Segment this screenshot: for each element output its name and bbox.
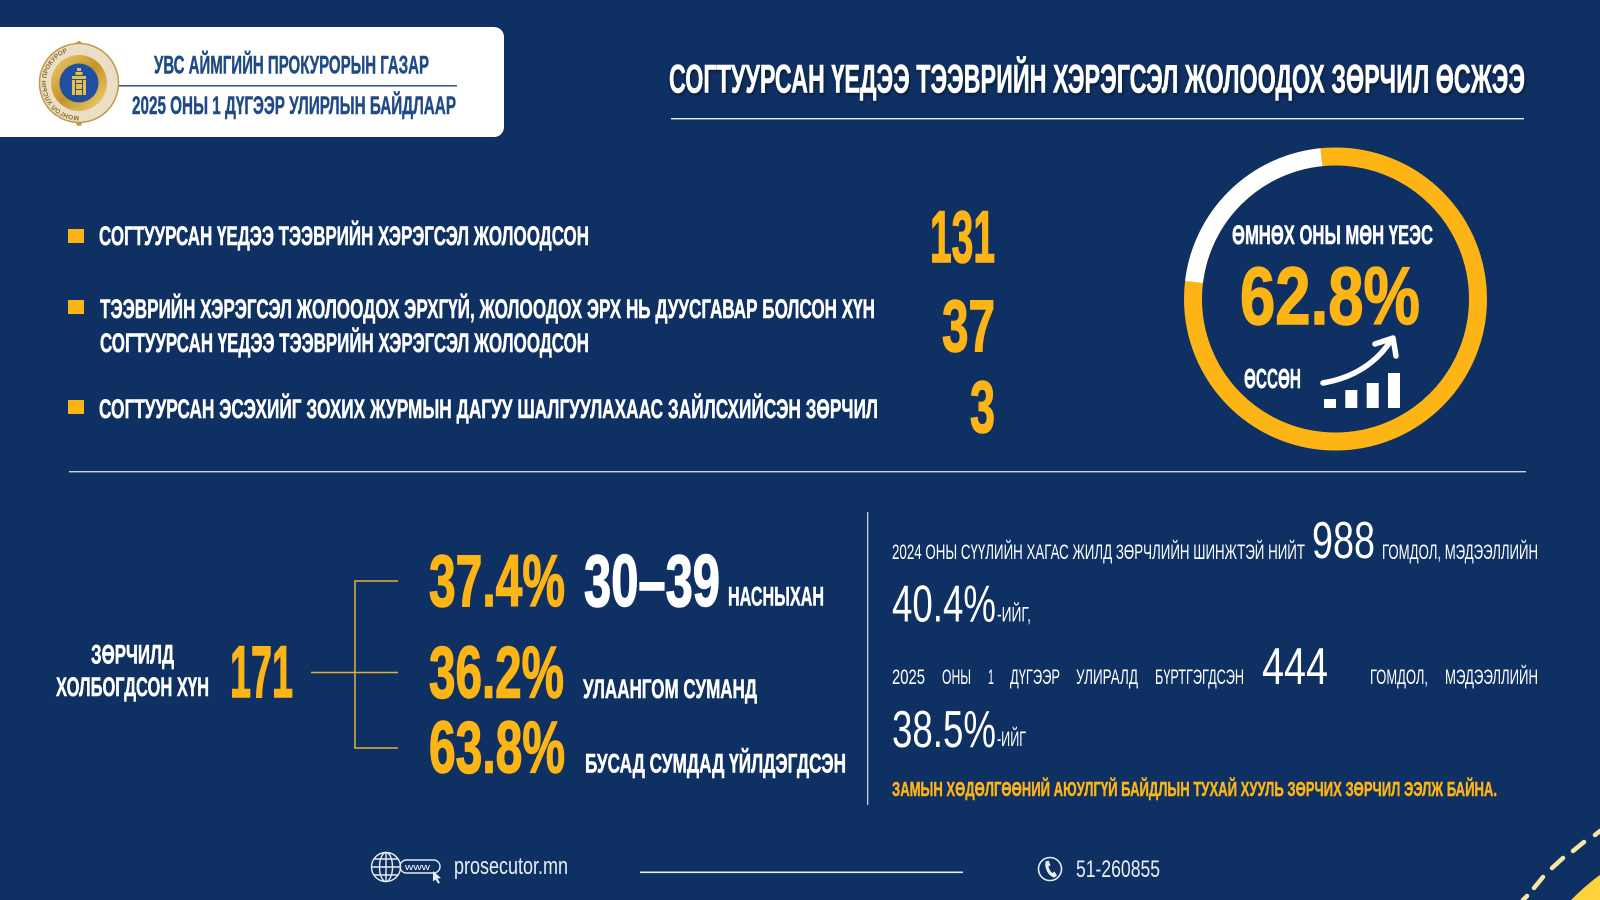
stat: Ulaangom soum: УЛААНГОМ СУМАНД [583, 674, 757, 704]
stat: age group: НАСНЫХАН [728, 582, 824, 612]
icon: prosecutor emblem [38, 41, 120, 126]
stat: other soums [429, 708, 846, 788]
text block: complaints [892, 512, 1538, 801]
list item 2: ТЭЭВРИЙН ХЭРЭГСЭЛ ЖОЛООДОХ ЭРХГҮЙ, ЖОЛООДОХ ЭРХ НЬ ДУУСГАВАР БОЛСОН ХҮН [100, 293, 875, 324]
icon: globe with www: www [404, 862, 431, 872]
stat: age group [429, 541, 824, 622]
footer: phone: 51-260855 [1076, 856, 1160, 883]
icon: phone [1038, 858, 1062, 880]
list item 2 [68, 286, 995, 367]
footer: phone [1038, 856, 1160, 883]
line: 2024 complaints [892, 512, 1538, 634]
donut: growth over last year: ӨМНӨХ ОНЫ МӨН ҮЕЭС [1232, 220, 1433, 250]
total persons [56, 632, 293, 713]
list item 2: 37 [942, 286, 995, 367]
line: 2025 complaints: ОНЫ [942, 666, 971, 689]
donut: growth over last year: 62.8% [1240, 251, 1420, 342]
line: 2025 complaints: 2025 [892, 666, 925, 689]
line: 2024 complaints: 2024 ОНЫ СҮҮЛИЙН ХАГАС ЖИЛД ЗӨРЧЛИЙН ШИНЖТЭЙ НИЙТ [892, 540, 1305, 564]
line: 2025 complaints: БҮРТГЭГДСЭН [1155, 666, 1244, 689]
line: 2024 complaints: 40.4% [892, 576, 996, 634]
total persons: ХОЛБОГДСОН ХҮН [56, 672, 209, 702]
line: 2025 complaints [892, 638, 1538, 759]
stat: other soums: 63.8% [429, 708, 565, 788]
line: 2025 complaints: УЛИРАЛД [1076, 666, 1138, 689]
icon: rising bars and arrow [1323, 338, 1400, 408]
list item 1 [68, 197, 995, 278]
stat: Ulaangom soum [429, 632, 757, 714]
corner decoration: road [1523, 831, 1600, 900]
bracket connector [311, 581, 398, 748]
icon: prosecutor emblem: МОНГОЛ УЛСЫН ПРОКУРОР [42, 48, 79, 120]
list item 3: СОГТУУРСАН ЭСЭХИЙГ ЗОХИХ ЖУРМЫН ДАГУУ ШАЛГУУЛАХААС ЗАЙЛСХИЙСЭН ЗӨРЧИЛ [99, 393, 878, 424]
stat: Ulaangom soum: 36.2% [429, 632, 564, 714]
footer: website [372, 852, 568, 884]
line: 2024 complaints: 988 [1312, 512, 1375, 570]
line: 2025 complaints: ГОМДОЛ, [1370, 666, 1428, 689]
donut: growth over last year: ӨССӨН [1244, 363, 1301, 394]
total persons: 171 [230, 632, 293, 713]
icon: globe with www [372, 852, 441, 884]
heading: organisation: УВС АЙМГИЙН ПРОКУРОРЫН ГАЗАР [154, 50, 429, 80]
line: 2025 complaints: -ИЙГ [997, 727, 1026, 751]
list item 2: СОГТУУРСАН ҮЕДЭЭ ТЭЭВРИЙН ХЭРЭГСЭЛ ЖОЛООДСОН [100, 327, 589, 358]
violations list [68, 197, 995, 448]
footer: website: prosecutor.mn [454, 853, 568, 880]
line: 2024 complaints: -ИЙГ, [997, 602, 1031, 626]
total persons: ЗӨРЧИЛД [91, 640, 174, 670]
line: 2025 complaints: 38.5% [892, 701, 996, 759]
line: 2025 complaints: ДҮГЭЭР [1010, 666, 1060, 689]
list item 1: СОГТУУРСАН ҮЕДЭЭ ТЭЭВРИЙН ХЭРЭГСЭЛ ЖОЛООДСОН [99, 220, 589, 251]
list item 3: 3 [970, 367, 995, 448]
line: 2025 complaints: 1 [988, 666, 994, 689]
stat: age group: 37.4% [429, 541, 565, 622]
list item 1: 131 [930, 197, 995, 278]
line: 2025 complaints: 444 [1262, 638, 1328, 696]
heading: period: 2025 ОНЫ 1 ДҮГЭЭР УЛИРЛЫН БАЙДЛААР [132, 90, 456, 120]
header card [0, 27, 504, 137]
stat: other soums: БУСАД СУМДАД ҮЙЛДЭГДСЭН [585, 748, 846, 778]
stat: age group: 30–39 [584, 541, 720, 622]
list item 3 [68, 367, 995, 448]
donut: growth over last year [1193, 156, 1478, 442]
line: 2025 complaints: МЭДЭЭЛЛИЙН [1445, 665, 1538, 689]
